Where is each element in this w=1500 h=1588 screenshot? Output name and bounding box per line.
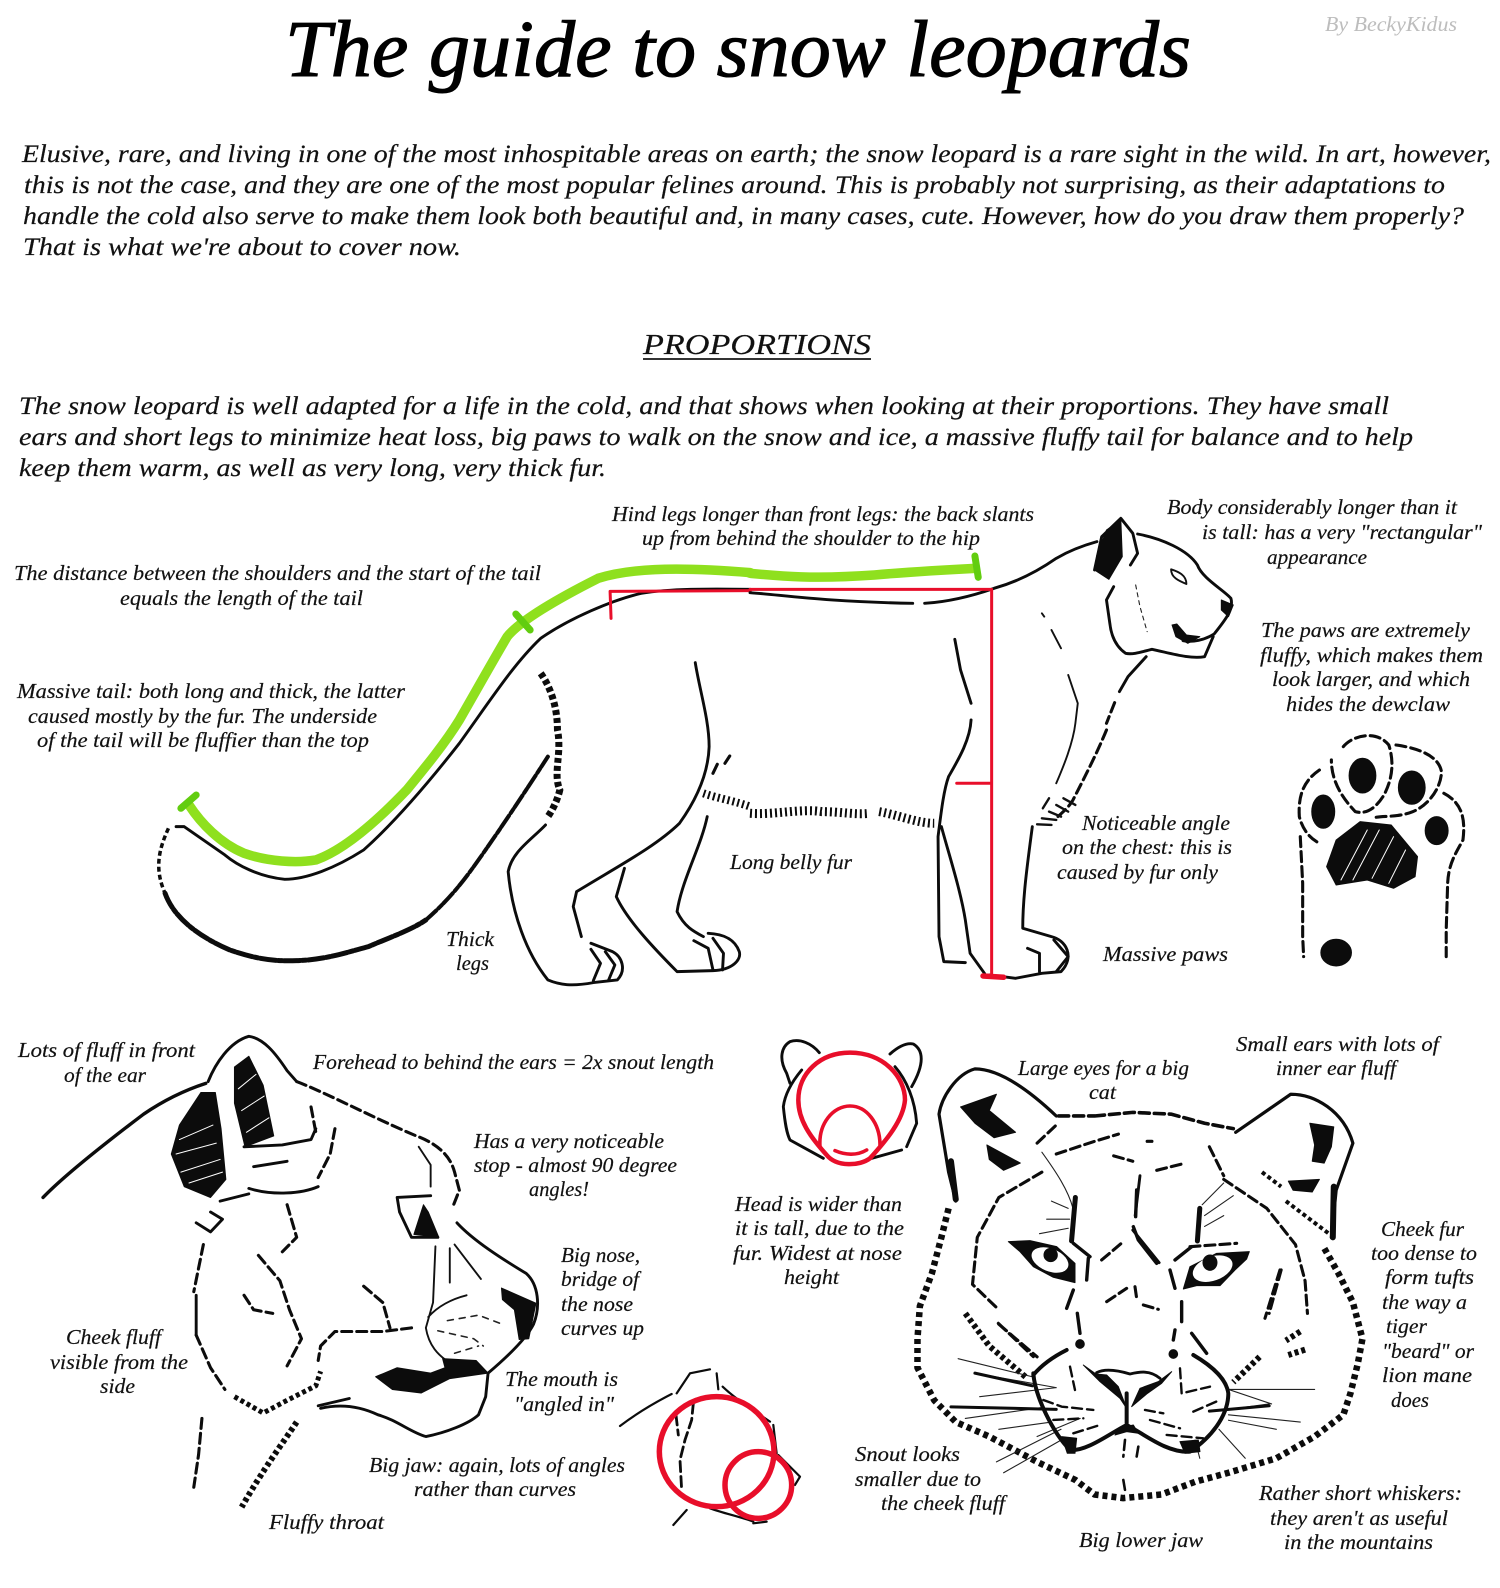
proportions paragraph: The snow leopard is well adapted for a life in the cold, and that shows when looking at their proportions. They have small <box>19 393 1389 420</box>
front of thigh and far hind leg <box>573 663 709 937</box>
label: throat: Fluffy throat <box>268 1510 385 1534</box>
label: whiskers: they aren't as useful <box>1270 1506 1448 1530</box>
forehead and muzzle profile <box>297 1082 459 1208</box>
annotation labels: front head <box>733 1032 1477 1554</box>
label: head width <box>733 1192 904 1289</box>
label: big nose: curves up <box>561 1316 644 1340</box>
brow and bridge lines <box>1067 1190 1207 1353</box>
label: head width: it is tall, due to the <box>735 1216 904 1240</box>
label: fluffy paws: The paws are extremely <box>1261 618 1471 642</box>
label: cheek fluff: side <box>100 1374 135 1398</box>
paw fur outline <box>1331 736 1392 812</box>
green tail length measure <box>189 569 750 862</box>
label: cheek fur: lion mane <box>1382 1363 1472 1387</box>
label: big nose: the nose <box>561 1292 633 1316</box>
label: cheek fur: too dense to <box>1371 1241 1477 1265</box>
label: hind legs: Hind legs longer than front legs: the back slants <box>611 502 1034 526</box>
annotation labels: body <box>14 495 1483 975</box>
proportions paragraph: ears and short legs to minimize heat loss, big paws to walk on the snow and ice, a massive fluffy tail for balance and to help <box>19 424 1413 451</box>
label: large eyes: cat <box>1089 1080 1117 1104</box>
drawing: full body snow leopard, rear half <box>159 569 750 985</box>
front leg <box>989 827 1068 978</box>
sketch lines <box>782 1041 921 1158</box>
label: small ears: Small ears with lots of <box>1236 1032 1442 1056</box>
neck line <box>43 1083 206 1197</box>
label: chest angle: on the chest: this is <box>1062 835 1232 859</box>
construction diagram: front head <box>782 1041 921 1164</box>
label: tail distance: The distance between the shoulders and the start of the tail <box>14 561 541 585</box>
drawing: full body snow leopard, front half <box>750 518 1233 978</box>
label: big nose <box>561 1243 644 1340</box>
mouth and muzzle <box>1033 1350 1228 1452</box>
ears <box>939 1069 1056 1201</box>
back and tail top line <box>176 589 750 879</box>
label: cheek fur: form tufts <box>1385 1265 1474 1289</box>
label: chest angle: caused by fur only <box>1057 860 1219 884</box>
dewclaw pad <box>1321 939 1351 966</box>
label: mouth: The mouth is <box>505 1367 618 1391</box>
label: massive paws: Massive paws <box>1102 942 1228 966</box>
label: thick legs <box>446 927 495 975</box>
label: large eyes: Large eyes for a big <box>1017 1056 1189 1080</box>
nose <box>1097 1370 1160 1378</box>
toe pads <box>1349 758 1376 793</box>
belly fur start <box>703 793 750 807</box>
label: head width: Head is wider than <box>734 1192 902 1216</box>
intro paragraph: handle the cold also serve to make them look both beautiful and, in many cases, cute. However, how do you draw them properly? <box>23 203 1465 230</box>
label: ear fluff: Lots of fluff in front <box>17 1038 196 1062</box>
label: cheek fluff <box>50 1325 188 1398</box>
label: cheek fur: Cheek fur <box>1381 1217 1465 1241</box>
label: ear fluff: of the ear <box>64 1063 147 1087</box>
ear <box>1095 518 1138 570</box>
label: massive tail: caused mostly by the fur. The underside <box>28 704 377 728</box>
front head: eyes, nose and mouth <box>998 1190 1280 1490</box>
label: whiskers: Rather short whiskers: <box>1258 1481 1462 1505</box>
label: whiskers: in the mountains <box>1284 1530 1433 1554</box>
section heading: proportions: PROPORTIONS <box>642 329 872 361</box>
intro paragraph: That is what we're about to cover now. <box>23 234 461 261</box>
label: body length: appearance <box>1267 545 1367 569</box>
cheek fluff outline <box>318 1286 412 1360</box>
label: lower jaw: Big lower jaw <box>1079 1528 1203 1552</box>
label: small ears <box>1236 1032 1442 1080</box>
label: cheek fur: does <box>1391 1388 1429 1412</box>
label: tail distance <box>14 561 541 610</box>
label: cheek fur <box>1371 1217 1477 1412</box>
drawing: side view head <box>43 1036 538 1507</box>
back line <box>750 542 1097 603</box>
label: body length: Body considerably longer than it <box>1167 495 1458 519</box>
label: snout: smaller due to <box>855 1467 981 1491</box>
annotation labels: side head <box>17 1038 714 1534</box>
intro paragraph: Elusive, rare, and living in one of the most inhospitable areas on earth; the snow leopard is a rare sight in the wild. In art, however, <box>21 141 1491 168</box>
label: fluffy paws: hides the dewclaw <box>1286 692 1450 716</box>
label: massive tail <box>16 679 406 752</box>
left eye <box>1008 1241 1075 1283</box>
label: head width: height <box>784 1265 840 1289</box>
label: snout <box>855 1442 1008 1515</box>
top of head <box>1059 1112 1233 1129</box>
label: stop: Has a very noticeable <box>473 1129 664 1153</box>
label: forehead: Forehead to behind the ears = 2x snout length <box>312 1050 714 1074</box>
label: body length <box>1167 495 1482 569</box>
label: fluffy paws: fluffy, which makes them <box>1260 643 1483 667</box>
neck and chest <box>1119 657 1146 692</box>
tail underside fur <box>159 828 168 893</box>
label: massive tail: of the tail will be fluffier than the top <box>37 728 369 752</box>
right eye <box>1183 1252 1249 1289</box>
red back line <box>610 591 750 618</box>
author credit: By BeckyKidus <box>1325 12 1457 36</box>
head outline <box>1138 534 1232 641</box>
nose <box>501 1288 536 1339</box>
label: snout: the cheek fluff <box>881 1491 1008 1515</box>
label: cheek fur: "beard" or <box>1382 1339 1475 1363</box>
label: cheek fur: the way a <box>1382 1290 1467 1314</box>
label: head width: fur. Widest at nose <box>733 1241 902 1265</box>
label: fluffy paws: look larger, and which <box>1272 667 1470 691</box>
drawing: paw underside <box>1299 736 1464 966</box>
long belly fur <box>750 811 934 823</box>
red guide shapes <box>798 1053 905 1164</box>
black fur in front of ear <box>171 1092 226 1197</box>
label: chest angle: Noticeable angle <box>1081 811 1230 835</box>
red shoulder height line <box>750 589 992 977</box>
sketch lines <box>620 1369 800 1525</box>
drawing: front view head <box>917 1069 1362 1498</box>
label: fluffy paws <box>1260 618 1483 716</box>
outer face fur <box>917 1208 1362 1498</box>
label: stop: stop - almost 90 degree <box>474 1153 677 1177</box>
intro paragraph: this is not the case, and they are one of the most popular felines around. This is probably not surprising, as their adaptations to <box>24 172 1445 199</box>
label: ear fluff <box>17 1038 196 1087</box>
label: thick legs: Thick <box>446 927 495 951</box>
label: large eyes <box>1017 1056 1189 1104</box>
label: cheek fur: tiger <box>1386 1314 1428 1338</box>
label: hind legs: up from behind the shoulder to the hip <box>642 526 980 550</box>
label: whiskers <box>1258 1481 1462 1554</box>
label: big nose: bridge of <box>561 1267 642 1291</box>
label: mouth <box>505 1367 618 1416</box>
label: belly fur: Long belly fur <box>729 850 853 874</box>
red circles <box>659 1397 774 1507</box>
label: stop <box>473 1129 677 1201</box>
rump fur <box>541 673 560 817</box>
label: big jaw <box>369 1453 625 1501</box>
label: thick legs: legs <box>456 951 489 975</box>
label: big jaw: Big jaw: again, lots of angles <box>369 1453 625 1477</box>
label: big nose: Big nose, <box>561 1243 640 1267</box>
proportions paragraph <box>19 393 1413 482</box>
label: hind legs <box>611 502 1034 550</box>
label: mouth: "angled in" <box>514 1392 614 1416</box>
label: massive tail: Massive tail: both long and thick, the latter <box>16 679 406 703</box>
fluffy throat <box>242 1422 297 1507</box>
ear <box>208 1036 297 1082</box>
near hind leg <box>508 825 622 985</box>
whiskers <box>951 1359 1315 1473</box>
muzzle lines <box>426 1245 481 1368</box>
label: snout: Snout looks <box>855 1442 960 1466</box>
main pad <box>1327 822 1418 888</box>
label: chest angle <box>1057 811 1232 884</box>
intro paragraph <box>21 141 1491 261</box>
label: big jaw: rather than curves <box>414 1477 576 1501</box>
label: small ears: inner ear fluff <box>1276 1056 1399 1080</box>
construction diagram: side head <box>620 1369 800 1525</box>
label: stop: angles! <box>529 1177 589 1201</box>
green line end <box>750 568 975 577</box>
mouth <box>376 1359 488 1393</box>
label: cheek fluff: visible from the <box>50 1350 188 1374</box>
label: cheek fluff: Cheek fluff <box>66 1325 164 1349</box>
proportions paragraph: keep them warm, as well as very long, very thick fur. <box>19 455 606 482</box>
title: The guide to snow leopards <box>285 6 1191 94</box>
inner face lines <box>973 1172 1307 1357</box>
label: body length: is tall: has a very "rectangular" <box>1202 520 1482 544</box>
label: tail distance: equals the length of the tail <box>120 586 363 610</box>
eye <box>397 1196 438 1237</box>
